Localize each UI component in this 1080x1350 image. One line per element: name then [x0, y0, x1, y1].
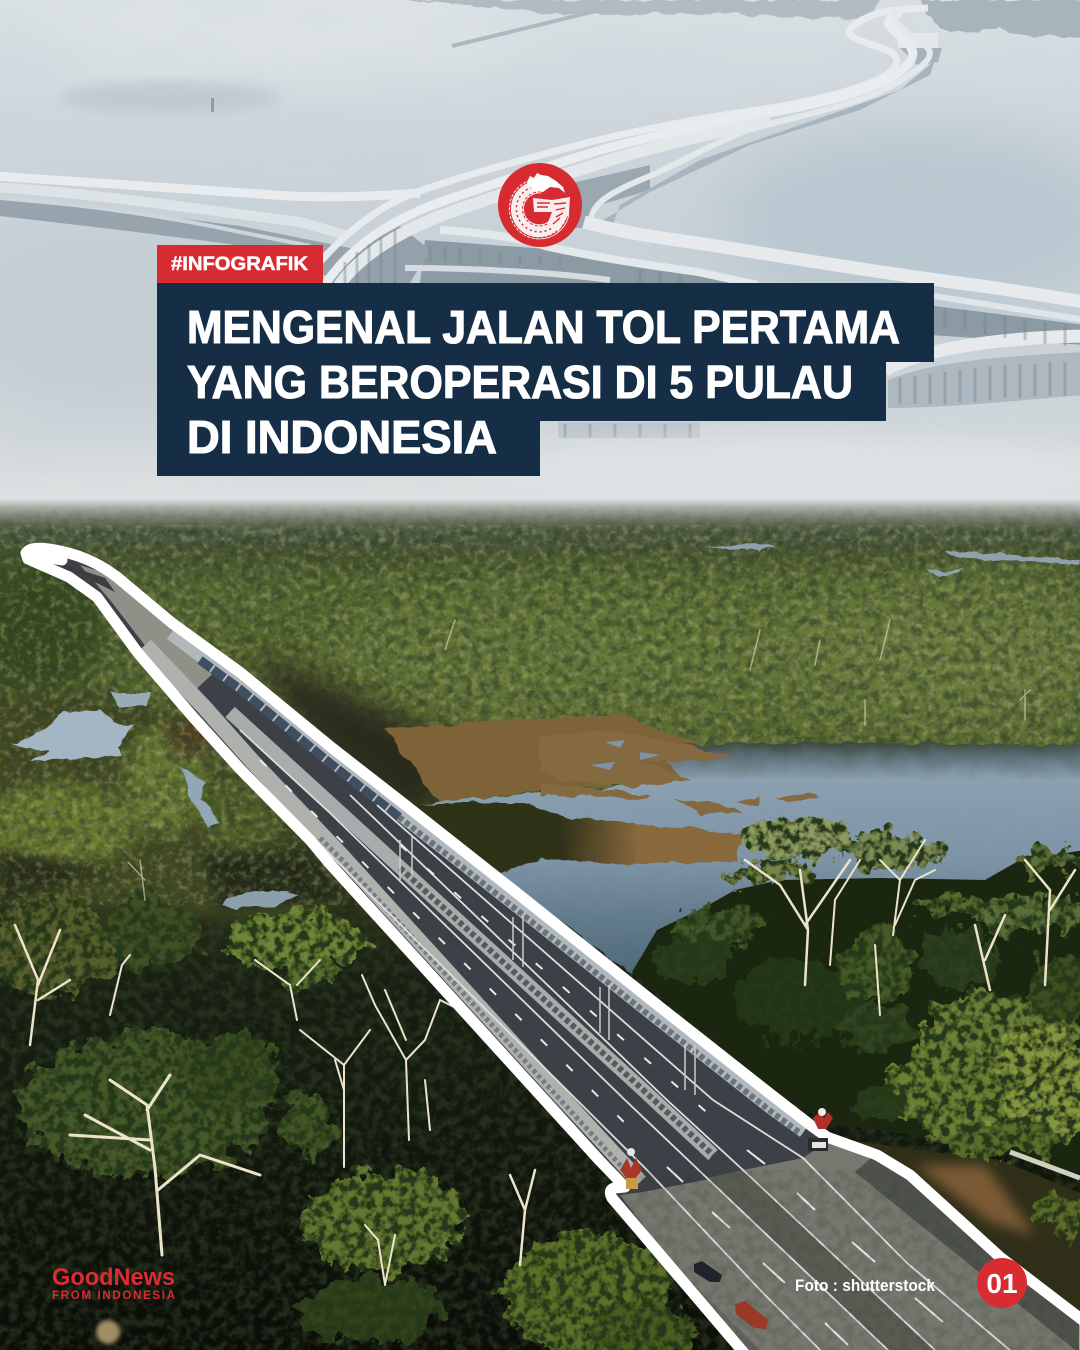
mudflat islands	[540, 743, 819, 816]
marker post	[211, 98, 214, 112]
low parapet	[145, 645, 640, 1182]
lane dashes	[260, 760, 943, 1345]
marsh left	[0, 690, 340, 925]
far concrete section	[80, 565, 212, 688]
horizon haze	[0, 500, 1080, 530]
car: red	[735, 1301, 768, 1329]
sunlit forest band	[353, 580, 795, 700]
title block	[157, 283, 934, 476]
tag: infografik: #INFOGRAFIK	[171, 254, 308, 275]
title block: MENGENAL JALAN TOL PERTAMA	[187, 301, 900, 353]
pale tree trunks	[15, 620, 1075, 1285]
photo credit: Foto : shutterstock	[795, 1276, 935, 1295]
pier stripes	[345, 230, 1065, 438]
brand wordmark: GoodNews	[52, 1264, 175, 1291]
car: black	[694, 1261, 722, 1282]
mudflat water gaps	[590, 740, 660, 770]
concrete pavement	[620, 1140, 1080, 1350]
logo eagle head	[527, 173, 565, 193]
distant hills	[0, 534, 1080, 548]
bridge decks	[0, 8, 1080, 370]
concrete shadow texture	[600, 1170, 1080, 1350]
small causeway	[452, 10, 600, 46]
page number badge: 01	[986, 1268, 1018, 1299]
right shaded understory	[0, 505, 1080, 1350]
brand wordmark: FROM INDONESIA	[52, 1290, 175, 1302]
lake	[420, 743, 1080, 975]
background photo: misty sea bridge	[0, 0, 1080, 510]
gate statue left	[620, 1148, 642, 1189]
gate statue right	[808, 1108, 833, 1151]
background photo: forest landscape	[0, 498, 1080, 1350]
tag: infografik	[157, 245, 323, 283]
white road outline	[26, 548, 1080, 1350]
distant islands	[400, 0, 1080, 38]
left bottom shrub	[96, 1320, 120, 1344]
left foreground canopies	[0, 893, 690, 1350]
upper noise barrier	[172, 632, 805, 1130]
right tree mass	[632, 850, 1080, 1175]
right canopies	[655, 816, 1080, 1158]
toll plaza	[898, 33, 942, 66]
eroded bank	[850, 1140, 1080, 1320]
brown flats	[385, 714, 742, 874]
road asphalt	[26, 548, 1080, 1350]
road shadow on land	[250, 650, 460, 820]
logo G bar	[533, 197, 570, 232]
left dark forest	[0, 560, 105, 700]
lane edge lines	[240, 730, 1012, 1350]
logo patterned G ring	[509, 180, 568, 238]
title block: DI INDONESIA	[187, 411, 497, 463]
central median	[230, 712, 713, 1155]
pools left	[12, 545, 1080, 908]
page number badge	[977, 1258, 1027, 1308]
title block: YANG BEROPERASI DI 5 PULAU	[187, 356, 853, 408]
bridge piers and shadows	[0, 60, 1080, 438]
toll road highlighted with white outline	[26, 548, 1080, 1350]
light poles	[400, 835, 695, 1095]
road tip	[30, 555, 62, 560]
logo badge	[498, 163, 582, 247]
